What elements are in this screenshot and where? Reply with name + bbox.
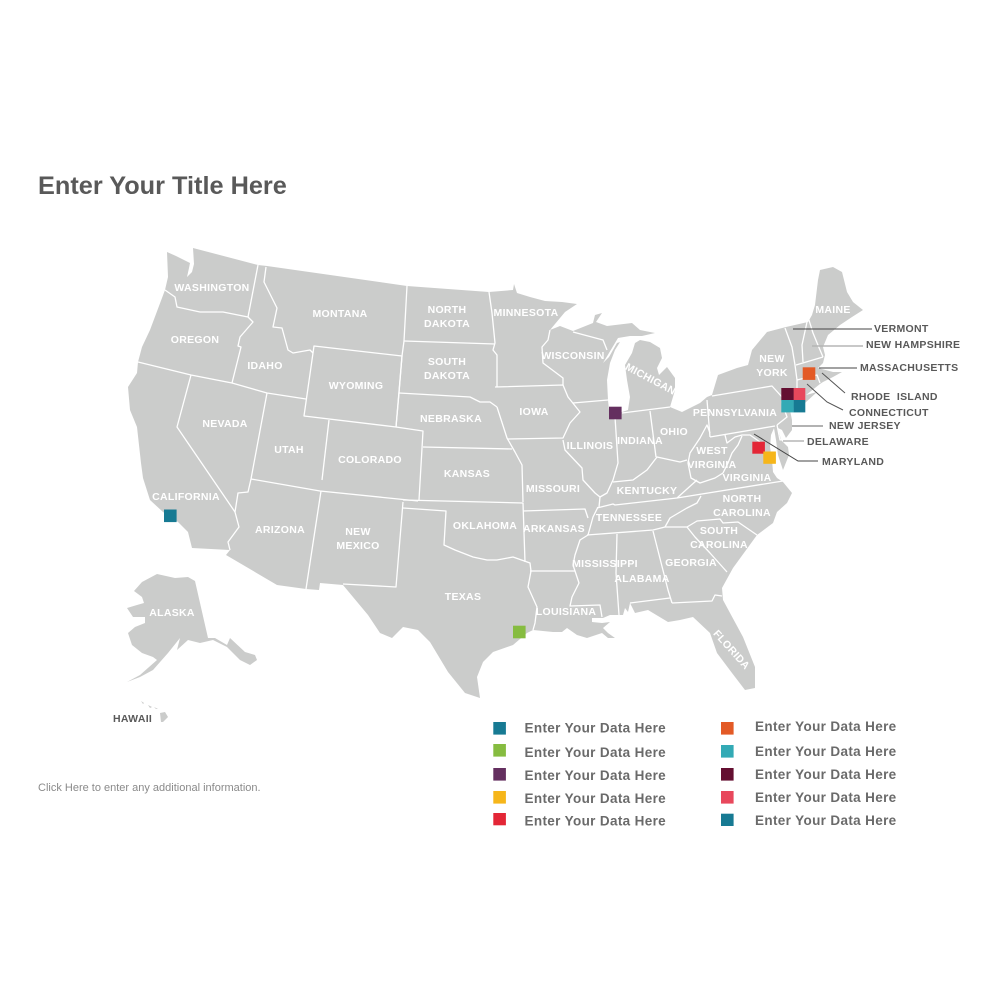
state name labels: NEW bbox=[759, 353, 785, 365]
state name labels: PENNSYLVANIA bbox=[693, 407, 777, 419]
callout labels: MARYLAND bbox=[822, 456, 884, 468]
state name labels: NEW bbox=[345, 526, 371, 538]
state name labels: ILLINOIS bbox=[567, 440, 613, 452]
callout labels: NEW HAMPSHIRE bbox=[866, 339, 960, 351]
state name labels: KENTUCKY bbox=[617, 485, 677, 497]
state name labels: CAROLINA bbox=[713, 507, 771, 519]
state name labels: NORTH bbox=[723, 493, 761, 505]
callout labels: CONNECTICUT bbox=[849, 407, 929, 419]
state name labels: WISCONSIN bbox=[541, 350, 605, 362]
state name labels: MAINE bbox=[815, 304, 851, 316]
state name labels: SOUTH bbox=[428, 356, 466, 368]
state name labels: TENNESSEE bbox=[596, 512, 662, 524]
legend: Enter Your Data Here bbox=[524, 720, 666, 736]
state name labels: OKLAHOMA bbox=[453, 520, 517, 532]
callout labels bbox=[807, 323, 960, 468]
state name labels: COLORADO bbox=[338, 454, 402, 466]
footnote: Click Here to enter any additional information. bbox=[38, 782, 261, 794]
state name labels: OHIO bbox=[660, 426, 688, 438]
state name labels: NORTH bbox=[428, 304, 466, 316]
state name labels: MEXICO bbox=[336, 540, 380, 552]
state name labels: YORK bbox=[756, 367, 788, 379]
legend: Enter Your Data Here bbox=[524, 768, 666, 783]
legend: Enter Your Data Here bbox=[755, 767, 897, 782]
data markers bbox=[164, 367, 815, 638]
legend: Enter Your Data Here bbox=[524, 745, 666, 760]
state name labels: SOUTH bbox=[700, 525, 738, 537]
state name labels: NEVADA bbox=[202, 418, 248, 430]
state name labels: UTAH bbox=[274, 444, 304, 456]
callout labels: MASSACHUSETTS bbox=[860, 362, 958, 374]
state name labels: MONTANA bbox=[313, 308, 368, 320]
state name labels: MISSOURI bbox=[526, 483, 580, 495]
title: Enter Your Title Here bbox=[38, 172, 287, 200]
state name labels: ARIZONA bbox=[255, 524, 305, 536]
callout labels: NEW JERSEY bbox=[829, 420, 901, 432]
leader lines bbox=[754, 329, 872, 461]
legend bbox=[493, 719, 897, 828]
state name labels: NEBRASKA bbox=[420, 413, 482, 425]
state name labels: VIRGINIA bbox=[687, 459, 737, 471]
state name labels bbox=[152, 282, 851, 672]
state name labels: VIRGINIA bbox=[722, 472, 772, 484]
state name labels: KANSAS bbox=[444, 468, 490, 480]
legend: Enter Your Data Here bbox=[755, 790, 897, 805]
state name labels: DAKOTA bbox=[424, 370, 470, 382]
state name labels: WYOMING bbox=[329, 380, 383, 392]
state name labels: TEXAS bbox=[445, 591, 481, 603]
state name labels: CAROLINA bbox=[690, 539, 748, 551]
state name labels: OREGON bbox=[171, 334, 219, 346]
callout labels: VERMONT bbox=[874, 323, 929, 335]
state name labels: WASHINGTON bbox=[174, 282, 250, 294]
legend: Enter Your Data Here bbox=[755, 744, 897, 759]
legend: Enter Your Data Here bbox=[755, 813, 897, 828]
legend: Enter Your Data Here bbox=[524, 791, 666, 806]
state name labels: DAKOTA bbox=[424, 318, 470, 330]
state name labels: ALABAMA bbox=[614, 573, 670, 585]
Hawaii bbox=[113, 701, 168, 725]
US map bbox=[128, 248, 863, 698]
state name labels: MISSISSIPPI bbox=[572, 558, 638, 570]
state name labels: IDAHO bbox=[247, 360, 283, 372]
callout labels: RHODE ISLAND bbox=[851, 391, 938, 403]
state borders bbox=[138, 265, 823, 630]
state name labels: INDIANA bbox=[617, 435, 663, 447]
state name labels: IOWA bbox=[519, 406, 549, 418]
legend: Enter Your Data Here bbox=[755, 719, 897, 734]
callout labels: DELAWARE bbox=[807, 436, 869, 448]
state name labels: CALIFORNIA bbox=[152, 491, 220, 503]
state name labels: MICHIGAN bbox=[623, 361, 678, 398]
state name labels: FLORIDA bbox=[710, 628, 752, 672]
state name labels: MINNESOTA bbox=[494, 307, 559, 319]
Alaska: ALASKA bbox=[149, 607, 195, 619]
state name labels: WEST bbox=[696, 445, 728, 457]
legend: Enter Your Data Here bbox=[524, 814, 666, 828]
state name labels: ARKANSAS bbox=[523, 523, 585, 535]
Hawaii: HAWAII bbox=[113, 713, 152, 725]
Alaska bbox=[127, 574, 257, 682]
state name labels: GEORGIA bbox=[665, 557, 717, 569]
contiguous states landmass bbox=[128, 248, 863, 698]
state name labels: LOUISIANA bbox=[536, 606, 596, 618]
